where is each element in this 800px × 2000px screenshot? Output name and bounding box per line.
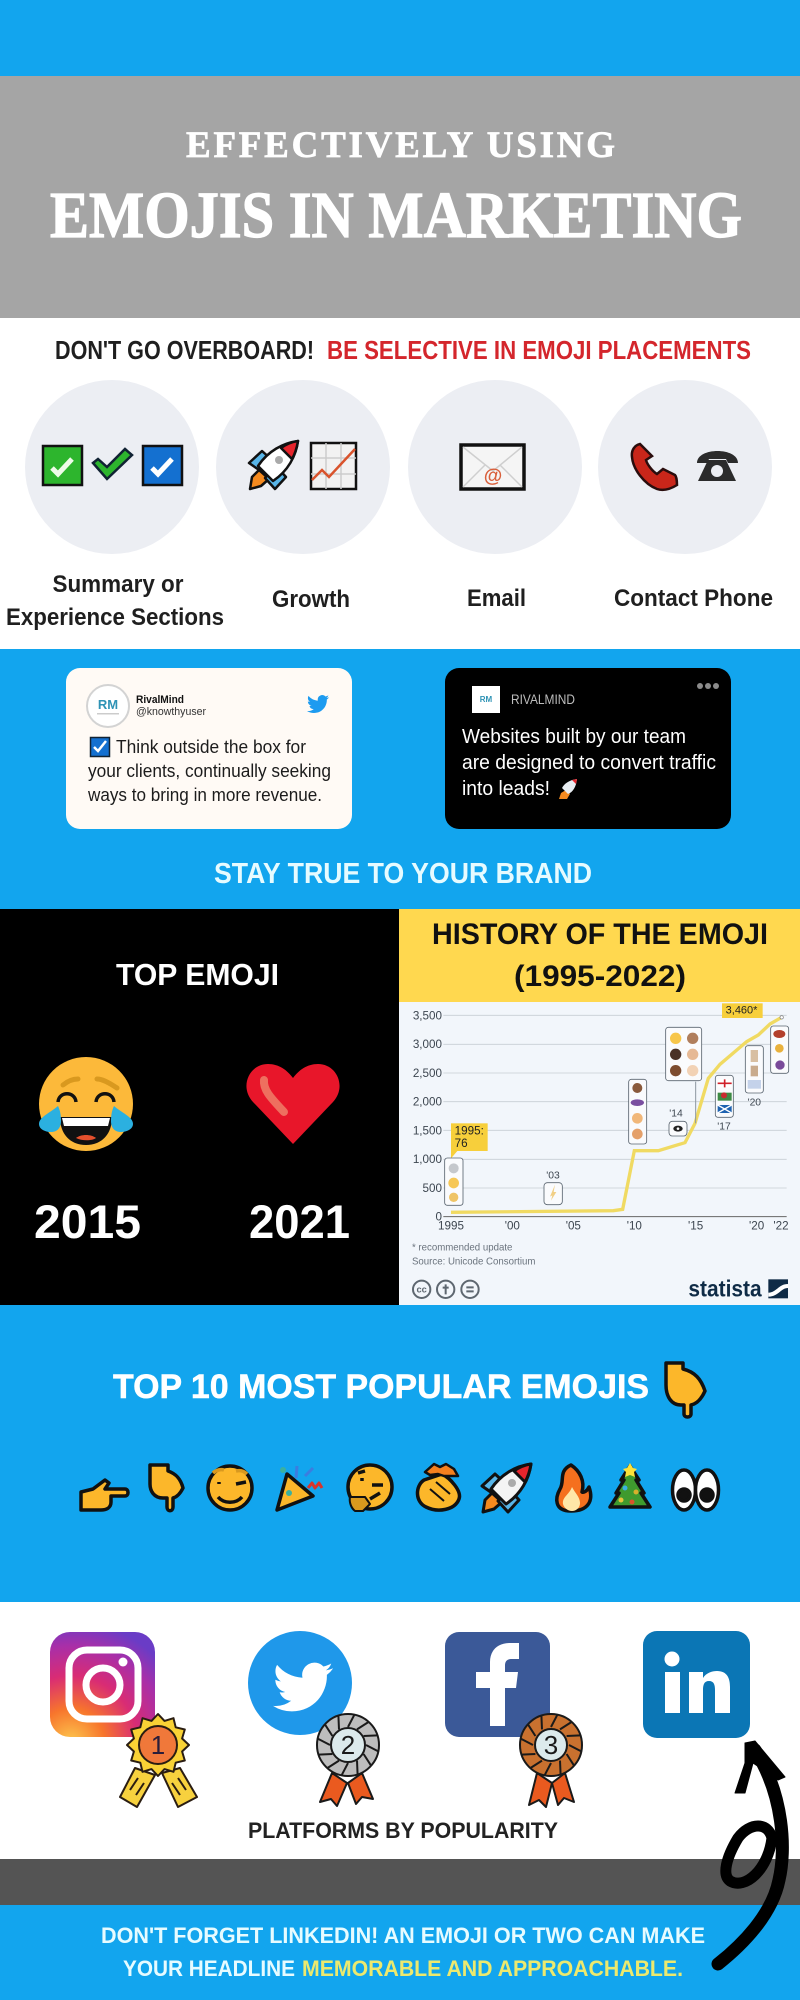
- line chart: 3,000: [413, 1038, 443, 1051]
- line chart: '15: [688, 1220, 703, 1233]
- callout line 2: [123, 1956, 683, 1981]
- line chart: 2,500: [413, 1067, 443, 1080]
- label: summary: Summary or: [52, 571, 184, 598]
- icon: twitter bird: [307, 695, 329, 713]
- circle: email icon: [408, 380, 582, 554]
- line chart: 1,000: [413, 1153, 443, 1166]
- icon: heading pointing hand: [666, 1363, 705, 1417]
- circle: email icon: @: [484, 466, 502, 487]
- logo tile: [472, 686, 500, 713]
- caption: platforms by popularity: PLATFORMS BY POPULARITY: [248, 1818, 558, 1843]
- panel: brand tweets: [0, 649, 800, 909]
- heading: top emoji: TOP EMOJI: [116, 957, 279, 992]
- emoji: winking face: [208, 1466, 252, 1510]
- brand name: RIVALMIND: [511, 691, 575, 707]
- post text: into leads!: [462, 778, 550, 800]
- top blue band: [0, 0, 800, 76]
- line chart: '10: [627, 1220, 642, 1233]
- panel: history of the emoji: [399, 909, 800, 1305]
- line chart: 3,500: [413, 1009, 443, 1022]
- caption: stay true: STAY TRUE TO YOUR BRAND: [214, 858, 592, 890]
- line chart: [413, 1003, 789, 1233]
- panel: top emoji: [0, 909, 399, 1305]
- tweet text: ways to bring in more revenue.: [87, 785, 322, 805]
- logo tile: RM: [480, 695, 493, 704]
- arrow to linkedin: [718, 1741, 785, 1964]
- tweet text: Think outside the box for: [116, 737, 306, 757]
- emoji: pointing right: [81, 1480, 128, 1510]
- user name: RivalMind: [136, 694, 184, 706]
- panel: platforms: [0, 1602, 800, 1859]
- year 2021: 2021: [249, 1195, 350, 1248]
- tweet text: [87, 737, 331, 805]
- badge: third place: [520, 1714, 582, 1807]
- label: summary: [6, 571, 224, 631]
- badge: first place: [120, 1714, 197, 1807]
- line chart: 0: [436, 1211, 443, 1224]
- card: dark post: [445, 668, 731, 829]
- heading: don't go overboard: [55, 335, 751, 365]
- heading: top 10: TOP 10 MOST POPULAR EMOJIS: [113, 1368, 649, 1406]
- line chart: 2,000: [413, 1096, 443, 1109]
- label: summary: Experience Sections: [6, 604, 224, 631]
- emoji: rocket: [482, 1464, 531, 1512]
- line chart: '03: [546, 1171, 560, 1182]
- tweet text: your clients, continually seeking: [88, 761, 331, 781]
- line chart: 1995: [438, 1220, 464, 1233]
- icon: laughing face: [39, 1057, 133, 1151]
- emoji: party popper: [277, 1466, 322, 1510]
- icon: facebook: [445, 1632, 550, 1737]
- emoji: fire: [557, 1465, 591, 1511]
- panel: linkedin callout: [0, 1905, 800, 2000]
- badge: first place: 1: [151, 1730, 165, 1760]
- line chart: '17: [717, 1121, 731, 1132]
- heading: dates: (1995-2022): [514, 960, 686, 993]
- icon: red heart: [246, 1064, 340, 1144]
- callout line 2: MEMORABLE AND APPROACHABLE.: [302, 1956, 683, 1981]
- label: contact phone: Contact Phone: [614, 585, 773, 612]
- licence icons: [413, 1281, 479, 1298]
- licence icons: cc: [416, 1285, 427, 1295]
- callout line 1: DON'T FORGET LINKEDIN! AN EMOJI OR TWO CAN MAKE: [101, 1923, 705, 1948]
- icon: instagram: [50, 1632, 155, 1737]
- heading: history: HISTORY OF THE EMOJI: [432, 918, 768, 951]
- emoji: christmas tree: [610, 1463, 650, 1507]
- statista logo: statista: [688, 1276, 762, 1302]
- line chart: '14: [669, 1109, 683, 1120]
- year 2015: 2015: [34, 1195, 141, 1248]
- badge: second place: 2: [341, 1730, 355, 1760]
- grey band: [0, 1859, 800, 1905]
- line chart: '20: [748, 1097, 761, 1108]
- card: light tweet: [66, 668, 352, 829]
- label: growth: Growth: [272, 586, 350, 613]
- line chart: 76: [455, 1137, 468, 1150]
- post text: are designed to convert traffic: [462, 752, 716, 774]
- menu dots: [697, 683, 719, 689]
- callout line 2: YOUR HEADLINE: [123, 1956, 295, 1981]
- emoji: pointing down: [150, 1465, 183, 1511]
- chart footnote: Source: Unicode Consortium: [412, 1256, 535, 1267]
- line chart: 1,500: [413, 1124, 443, 1137]
- line chart: 500: [423, 1182, 443, 1195]
- icon: chart: [311, 443, 356, 489]
- circle: summary icons: [25, 380, 199, 554]
- icon: checkbox: [90, 738, 110, 756]
- heading: don't go overboard: DON'T GO OVERBOARD!: [55, 335, 314, 365]
- avatar: RM: [98, 697, 118, 712]
- title line 1: EFFECTIVELY USING: [186, 125, 615, 166]
- badge: second place: [317, 1714, 379, 1806]
- line chart: 3,460*: [726, 1004, 758, 1016]
- user handle: @knowthyuser: [136, 706, 206, 718]
- icon: twitter: [248, 1631, 352, 1735]
- chart footnote: [412, 1242, 535, 1267]
- panel: emoji placements: [0, 318, 800, 649]
- panel: top 10 emojis: [0, 1305, 800, 1602]
- circle: growth icons: [216, 380, 390, 554]
- line chart: '22: [773, 1220, 789, 1233]
- avatar: [87, 685, 129, 727]
- post text: Websites built by our team: [462, 726, 686, 748]
- line chart: '20: [749, 1220, 765, 1233]
- chart footnote: * recommended update: [412, 1242, 512, 1253]
- circle: phone icons: [598, 380, 772, 554]
- emoji: thinking face: [348, 1465, 392, 1511]
- post text: [462, 726, 716, 800]
- emoji row: [81, 1463, 718, 1512]
- line chart: 1995:: [455, 1124, 484, 1137]
- badge: third place: 3: [544, 1730, 558, 1760]
- panel: title banner: [0, 76, 800, 318]
- icon: rocket: [249, 441, 298, 489]
- line chart: '00: [505, 1220, 520, 1233]
- icon: linkedin: [643, 1631, 750, 1738]
- icon: small rocket: [559, 779, 577, 799]
- label: email: Email: [467, 585, 526, 612]
- emoji: eyes: [672, 1470, 718, 1510]
- line chart: '05: [566, 1220, 581, 1233]
- emoji: clapping hands: [417, 1464, 459, 1510]
